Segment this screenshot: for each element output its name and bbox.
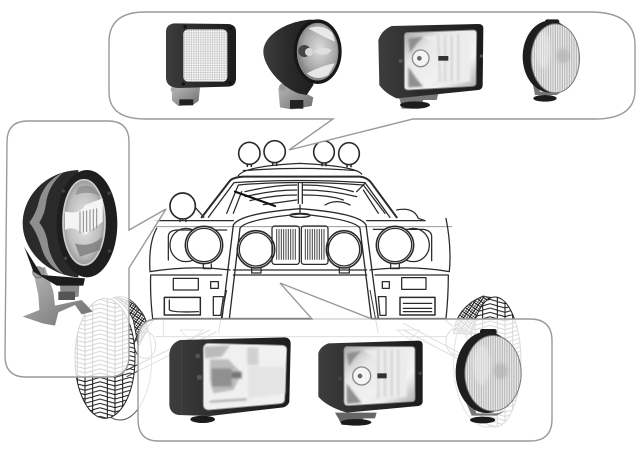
left tyre xyxy=(75,297,152,420)
lamp: medium rectangular lamp xyxy=(318,341,423,426)
mount bracket xyxy=(23,247,93,326)
lamp: round fog lamp xyxy=(523,19,580,102)
lamp lens xyxy=(63,180,105,265)
hood line xyxy=(153,225,452,228)
wheels and suspension xyxy=(75,290,521,427)
panel: bottom lamps callout xyxy=(138,283,552,441)
big round lamps xyxy=(185,226,414,268)
lamp: square work lamp xyxy=(166,23,236,106)
lamps in top panel: work lamp and round long-range lamp xyxy=(166,19,342,109)
right tyre xyxy=(453,296,521,427)
panel: left lamp callout xyxy=(5,121,166,377)
grille xyxy=(272,226,299,264)
lamp housing xyxy=(23,170,78,277)
side mirror lamp xyxy=(170,193,195,219)
suspension arms xyxy=(127,290,467,377)
lamp in left panel xyxy=(23,170,117,326)
panel: top lamps callout xyxy=(109,12,635,150)
lamp: large rectangular lamp xyxy=(169,337,291,423)
bull bar xyxy=(222,209,378,319)
roof and rack xyxy=(238,163,362,176)
lamp: round fog lamp xyxy=(456,329,522,423)
lamp: round long-range lamp xyxy=(263,19,342,109)
headlight surrounds xyxy=(168,229,432,261)
housing stripe xyxy=(29,172,63,274)
lamp bezel xyxy=(57,170,117,277)
roof lamps xyxy=(239,141,359,167)
bumper xyxy=(151,275,448,319)
lamp: wide rectangular lamp xyxy=(378,24,483,109)
windscreen lines xyxy=(245,185,357,205)
car line drawing xyxy=(150,141,452,319)
wiper xyxy=(235,192,275,206)
